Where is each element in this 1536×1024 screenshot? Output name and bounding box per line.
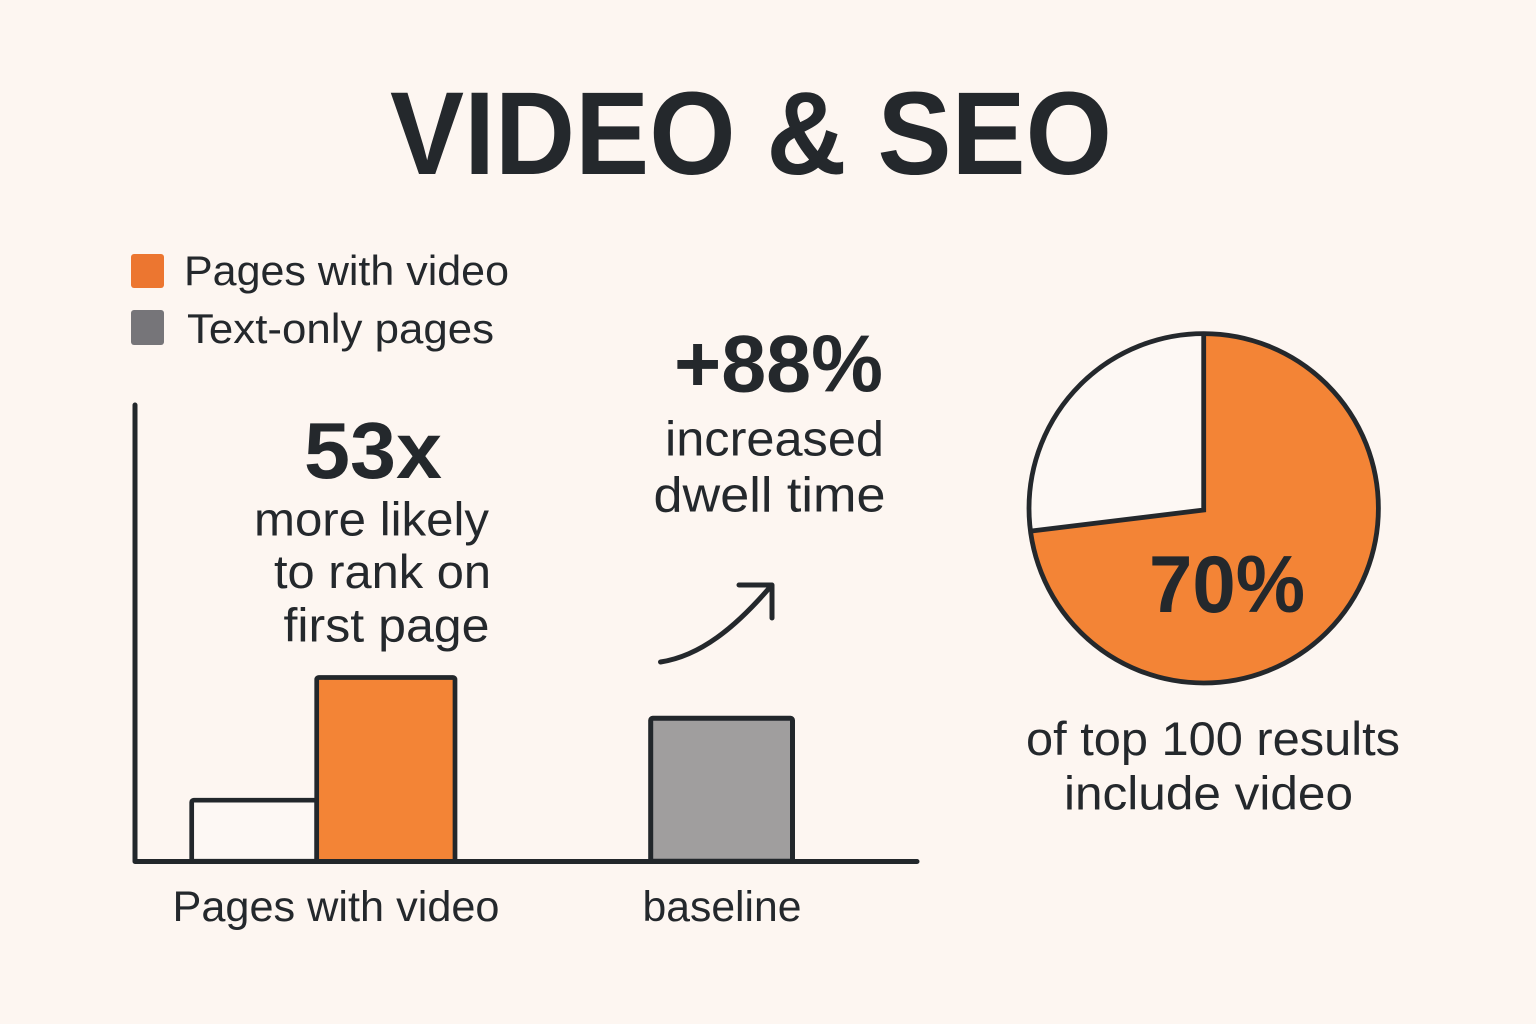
- legend swatch: pages with video: [131, 254, 164, 288]
- legend label: pages with video: Pages with video: [184, 247, 509, 294]
- pie caption: include video: [1064, 766, 1353, 820]
- pie value: 70%: [1149, 540, 1305, 630]
- chart axes: [135, 405, 917, 862]
- x label: baseline: baseline: [642, 883, 802, 931]
- gray bar: [651, 718, 792, 861]
- pie base: remainder: [1029, 334, 1378, 683]
- legend: [131, 247, 509, 352]
- pie caption: of top 100 results: [1026, 712, 1400, 765]
- pie slice: 70%: [1032, 334, 1379, 683]
- stat: 53x: 53x: [304, 406, 442, 495]
- pie outline: [1029, 334, 1378, 683]
- pie chart: [1029, 334, 1379, 683]
- callout: 53x: [254, 406, 504, 652]
- stat description: more likely: [254, 492, 490, 546]
- callout: +88%: [654, 320, 898, 522]
- white bar: [192, 800, 317, 861]
- stat description: increased: [665, 412, 884, 466]
- legend label: text-only pages: Text-only pages: [187, 305, 494, 352]
- orange bar: [317, 678, 455, 862]
- stat: +88%: +88%: [674, 320, 883, 410]
- x label: pages with video: Pages with video: [172, 883, 500, 931]
- legend swatch: text-only pages: [131, 310, 164, 345]
- stat description: first page: [284, 598, 490, 652]
- stat description: to rank on: [274, 545, 491, 598]
- bar chart: [135, 405, 917, 931]
- arrow: [660, 585, 772, 662]
- title: VIDEO & SEO: [390, 68, 1112, 200]
- stat description: dwell time: [654, 468, 886, 522]
